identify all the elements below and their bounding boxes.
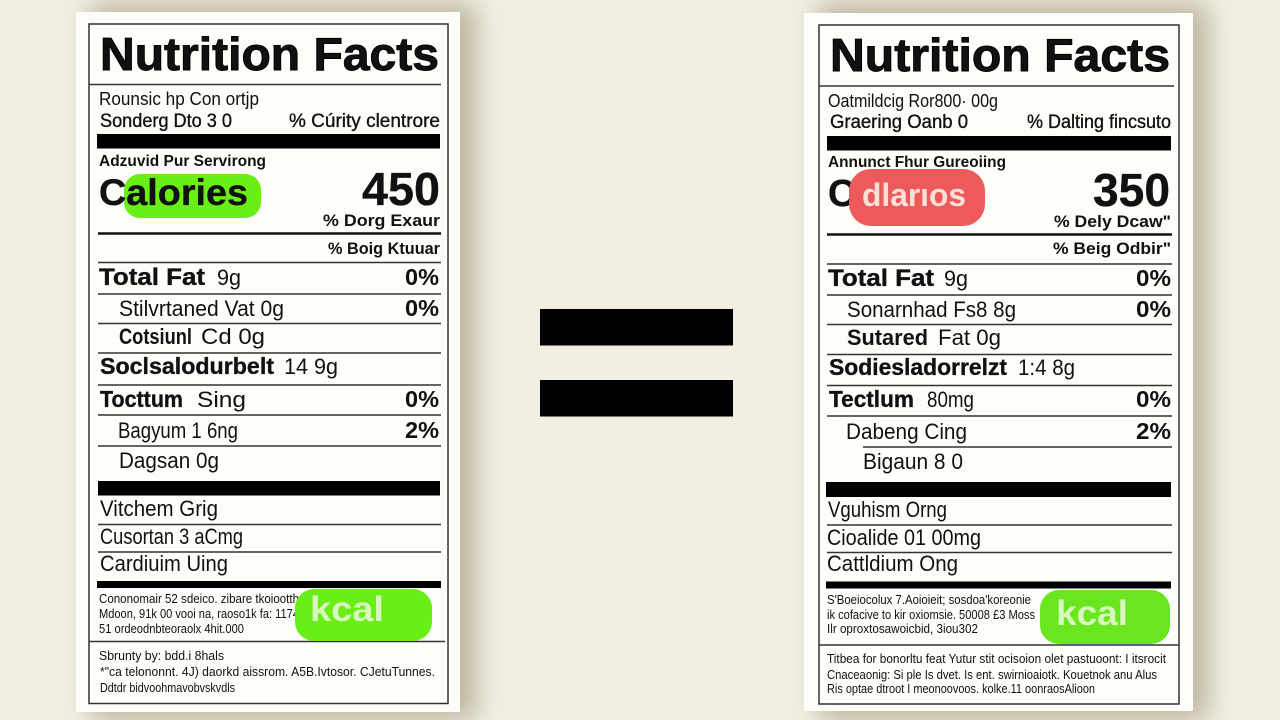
disclaimer text [827, 651, 1166, 696]
vitamin rows [827, 497, 981, 576]
daily value notes [1053, 212, 1171, 258]
footnote text: 51 ordeodnbteoraolx 4hit.000 [99, 622, 244, 636]
nutrient rows: 80mg [927, 387, 974, 412]
nutrient rows: 0% [405, 386, 439, 412]
calories badge: dlarıos [862, 177, 966, 213]
nutrient rows: Tocttum [100, 386, 183, 412]
nutrient rows: Soclsalodurbelt [100, 353, 274, 379]
serving info: % Cúrity clentrore [289, 111, 440, 132]
footnote text: Mdoon, 91k 00 vooi na, raoso1k fa: 1174 [99, 607, 299, 621]
serving info: Rounsic hp Con ortjp [99, 89, 259, 109]
nutrient rows: Sodiesladorrelzt [829, 354, 1007, 380]
daily value notes [323, 211, 440, 258]
daily value notes: % Beig Odbir" [1053, 239, 1171, 258]
footnote text: Cononomair 52 sdeico. zibare tkoiootth [99, 592, 299, 606]
kcal badge: kcal [1056, 594, 1128, 633]
footnote text [827, 593, 1035, 636]
thick bar [826, 582, 1171, 588]
vitamin rows [100, 496, 243, 576]
disclaimer text: Titbea for bonorltu feat Yutur stit ocisoion olet pastuoont: I itsrocit [827, 651, 1166, 666]
calories value: 350 [1093, 164, 1170, 216]
disclaimer text: Ris optae dtroot I meonoovoos. kolke.11 oonraosAlioon [827, 681, 1095, 696]
nutrient rows: 14 9g [284, 354, 338, 379]
nutrient rows [828, 265, 1171, 474]
title: Nutrition Facts [830, 29, 1170, 81]
divider lines [89, 84, 445, 642]
nutrient rows: 2% [405, 417, 439, 443]
vitamin rows: Vitchem Grig [100, 496, 218, 521]
amount per serving: Annunct Fhur Gureoiing [828, 154, 1006, 171]
footnote text: S'Boeiocolux 7.Aoioieit; sosdoa'koreonie [827, 593, 1031, 607]
footnote text: ik cofacive to kir oxiomsie. 50008 £3 Moss [827, 608, 1035, 622]
vitamin rows: Cattldium Ong [827, 551, 958, 576]
nutrient rows: 1:4 8g [1018, 355, 1075, 380]
calories highlight [124, 174, 261, 218]
disclaimer text: Sbrunty by: bdd.i 8hals [99, 648, 224, 663]
nutrient rows: Bigaun 8 0 [863, 449, 963, 474]
divider lines [819, 86, 1179, 645]
thick bar [97, 581, 441, 588]
nutrient rows: 2% [1136, 418, 1171, 444]
calories value: 450 [362, 163, 440, 215]
card shadow [90, 4, 476, 720]
disclaimer text [99, 648, 435, 695]
thick bar [98, 481, 440, 496]
vitamin rows: Cioalide 01 00mg [827, 525, 981, 550]
nutrient rows: 0% [1136, 265, 1171, 291]
nutrient rows [99, 264, 439, 473]
thick bar [827, 136, 1171, 150]
thick bar [97, 134, 440, 148]
daily value notes: % Dorg Exaur [323, 211, 440, 230]
equals sign [540, 309, 733, 416]
nutrient rows: 0% [405, 264, 439, 290]
nutrient rows: Dagsan 0g [119, 448, 219, 473]
nutrient rows: Tectlum [829, 386, 914, 412]
serving info: Oatmildcig Ror800· 00g [828, 91, 998, 111]
nutrient rows: 9g [217, 265, 241, 290]
nutrient rows: 9g [944, 266, 968, 291]
calories badge [849, 169, 985, 226]
card [76, 12, 460, 712]
serving info: % Dalting fincsuto [1027, 112, 1171, 133]
disclaimer text: Cnaceaonig: Si ple Is dvet. Is ent. swirnioaiotk. Kouetnok anu Alus [827, 667, 1157, 682]
nutrient rows: Sutared [847, 325, 928, 350]
label border [89, 24, 448, 704]
calories label: Calories [99, 172, 248, 213]
thick bar [826, 482, 1171, 497]
kcal badge: kcal [310, 590, 384, 629]
footnote text [99, 592, 299, 636]
footnote text: Ilr oproxtosawoicbid, 3iou302 [827, 622, 978, 636]
calories letter: C [828, 173, 855, 215]
label border [819, 25, 1179, 704]
card [804, 13, 1193, 711]
nutrient rows: Total Fat [99, 264, 205, 291]
disclaimer text: Ddtdr bidvoohmavobvskvdls [100, 680, 235, 695]
nutrient rows: Bagyum 1 6ng [118, 418, 238, 443]
panel: left nutrition label [76, 4, 476, 720]
serving info: Sonderg Dto 3 0 [100, 111, 232, 132]
amount per serving: Adzuvid Pur Servirong [99, 153, 266, 170]
nutrient rows: Sonarnhad Fs8 8g [847, 297, 1016, 322]
nutrient rows: Cd 0g [201, 324, 265, 349]
card shadow [818, 4, 1208, 720]
nutrient rows: Dabeng Cing [846, 419, 967, 444]
disclaimer text: *"ca telononnt. 4J) daorkd aissrom. A5B.Ivtosor. CJetuTunnes. [100, 664, 435, 679]
nutrient rows: 0% [1136, 296, 1171, 322]
nutrient rows: Total Fat [828, 265, 934, 292]
vitamin rows: Vguhism Orng [828, 497, 947, 522]
kcal badge [1040, 590, 1170, 644]
kcal badge [295, 589, 432, 641]
daily value notes: % Dely Dcaw" [1054, 212, 1171, 231]
vitamin rows: Cusortan 3 aCmg [100, 524, 243, 549]
daily value notes: % Boig Ktuuar [328, 239, 440, 258]
title: Nutrition Facts [100, 28, 439, 80]
panel: right nutrition label [804, 4, 1208, 720]
nutrient rows: 0% [405, 295, 439, 321]
serving info: Graering Oanb 0 [830, 112, 968, 133]
nutrient rows: Cotsiunl [119, 324, 192, 349]
nutrient rows: Stilvrtaned Vat 0g [119, 296, 284, 321]
serving info [99, 89, 440, 132]
nutrient rows: 0% [1136, 386, 1171, 412]
nutrient rows: Fat 0g [938, 325, 1001, 350]
vitamin rows: Cardiuim Uing [100, 551, 228, 576]
nutrient rows: Sing [197, 387, 246, 412]
serving info [828, 91, 1171, 133]
